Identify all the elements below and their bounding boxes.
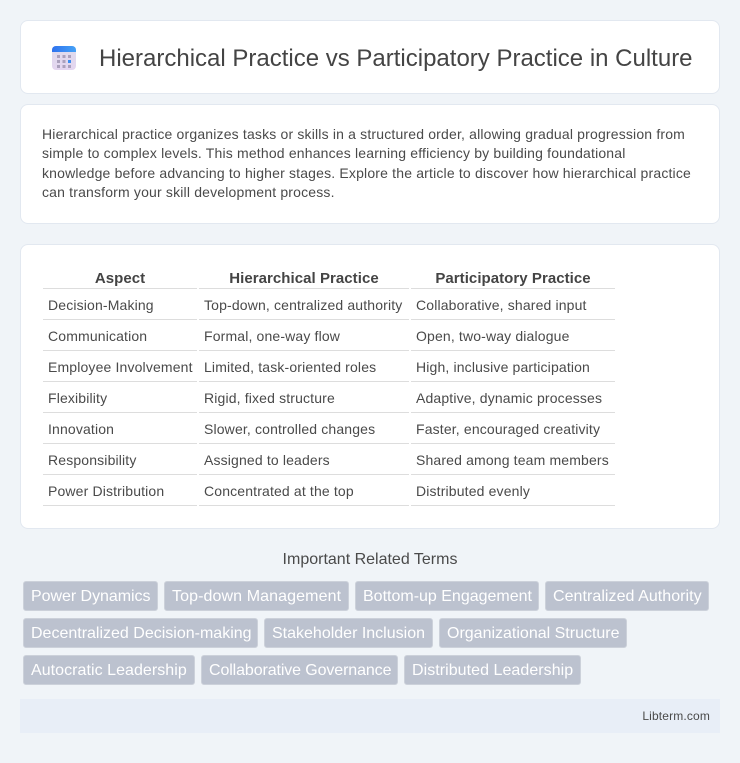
row: Flexibility: Adaptive, dynamic processes xyxy=(416,390,602,406)
panel: introduction xyxy=(20,104,720,224)
panel: comparison table xyxy=(20,244,720,529)
text block: introduction: can transform your skill development process. xyxy=(42,184,335,200)
row: Flexibility xyxy=(48,390,602,406)
column headers: Participatory Practice xyxy=(435,270,591,287)
text block: introduction: Hierarchical practice organizes tasks or skills in a structured order, allowing gradual progression from xyxy=(42,126,685,142)
row: Flexibility: Flexibility xyxy=(48,390,107,406)
footer credit: Libterm.com xyxy=(642,709,710,723)
row: Innovation: Faster, encouraged creativity xyxy=(416,421,600,437)
panel: title header xyxy=(20,20,720,94)
row: Communication xyxy=(48,328,570,344)
tag group: related terms: Bottom-up Engagement xyxy=(363,588,532,605)
row: Responsibility xyxy=(48,452,609,468)
footer bar xyxy=(20,699,720,733)
row: Flexibility: Rigid, fixed structure xyxy=(204,390,335,406)
tag group: related terms: Collaborative Governance xyxy=(209,662,391,679)
row: Power Distribution: Distributed evenly xyxy=(416,483,530,499)
row: Employee Involvement: High, inclusive participation xyxy=(416,359,590,375)
tag group: related terms: Power Dynamics xyxy=(31,588,150,605)
column headers xyxy=(95,270,591,287)
row: Responsibility: Shared among team members xyxy=(416,452,609,468)
tag group: related terms: Autocratic Leadership xyxy=(31,662,187,679)
tag group: related terms: Distributed Leadership xyxy=(412,662,573,679)
row: Innovation: Innovation xyxy=(48,421,114,437)
row: Employee Involvement: Employee Involvement xyxy=(48,359,193,375)
row: Employee Involvement xyxy=(48,359,590,375)
row: Employee Involvement: Limited, task-oriented roles xyxy=(204,359,376,375)
row: Decision-Making xyxy=(48,297,587,313)
row: Communication: Open, two-way dialogue xyxy=(416,328,570,344)
tag group: related terms: Organizational Structure xyxy=(447,625,620,642)
tag group: related terms xyxy=(23,581,709,685)
row: Decision-Making: Decision-Making xyxy=(48,297,154,313)
row: Decision-Making: Top-down, centralized authority xyxy=(204,297,402,313)
text block: introduction xyxy=(42,126,691,200)
row: Power Distribution: Power Distribution xyxy=(48,483,164,499)
text block: introduction: knowledge before advancing to higher stages. Explore the article to discover how hierarchical practice xyxy=(42,165,691,181)
row: Communication: Formal, one-way flow xyxy=(204,328,340,344)
comparison table xyxy=(43,270,615,506)
heading: related terms: Important Related Terms xyxy=(283,551,457,568)
tag group: related terms: Top-down Management xyxy=(172,588,341,605)
tag group: related terms: Stakeholder Inclusion xyxy=(272,625,425,642)
tag group: related terms: Centralized Authority xyxy=(553,588,702,605)
row: Communication: Communication xyxy=(48,328,147,344)
tag group: related terms: Decentralized Decision-making xyxy=(31,625,252,642)
icon: calendar xyxy=(52,46,76,70)
row: Power Distribution: Concentrated at the top xyxy=(204,483,354,499)
column headers: Hierarchical Practice xyxy=(229,270,379,287)
text block: introduction: simple to complex levels. This method enhances learning efficiency by building foundational xyxy=(42,145,626,161)
column headers: Aspect xyxy=(95,270,145,287)
title: Hierarchical Practice vs Participatory Practice in Culture xyxy=(99,45,693,72)
row: Responsibility: Assigned to leaders xyxy=(204,452,330,468)
row: Innovation xyxy=(48,421,600,437)
row: Power Distribution xyxy=(48,483,530,499)
row: Innovation: Slower, controlled changes xyxy=(204,421,375,437)
row: Responsibility: Responsibility xyxy=(48,452,136,468)
row: Decision-Making: Collaborative, shared input xyxy=(416,297,587,313)
